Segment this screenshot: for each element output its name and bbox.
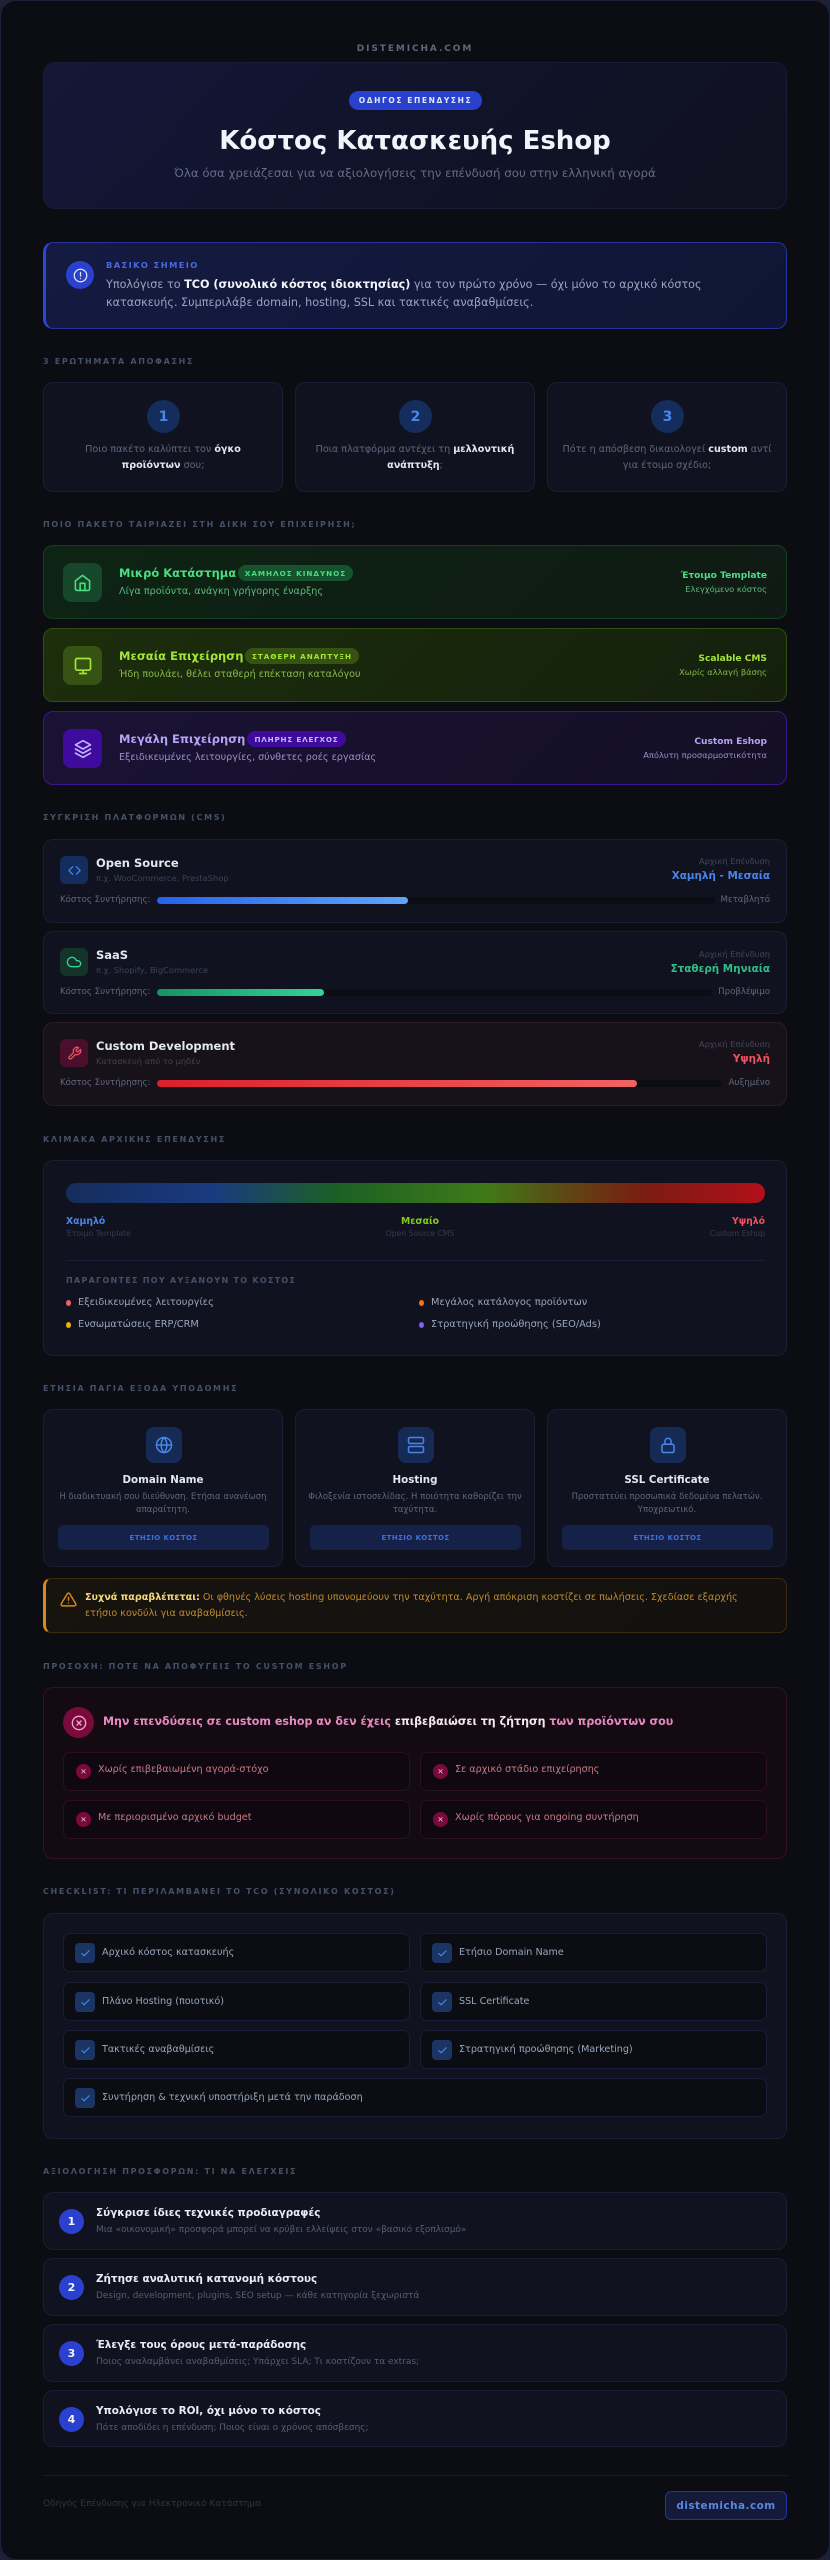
number 1 [147, 400, 180, 433]
investment label: Αρχική Επένδυση [699, 1039, 770, 1049]
question text: για έτοιμο σχέδιο; [623, 460, 711, 471]
icon: x circle [63, 1707, 94, 1738]
heading: tco checklist: CHECKLIST: ΤΙ ΠΕΡΙΛΑΜΒΑΝΕΙ ΤΟ TCO (ΣΥΝΟΛΙΚΟ ΚΟΣΤΟΣ) [43, 1887, 396, 1896]
item 3 [63, 1800, 410, 1839]
maintenance bar [157, 1080, 722, 1087]
factor 2: Μεγάλος κατάλογος προϊόντων [431, 1297, 587, 1308]
step number [59, 2275, 84, 2300]
panel: small store [43, 545, 787, 619]
maintenance label: Κόστος Συντήρησης: [60, 1078, 150, 1088]
item 2 [420, 1752, 767, 1791]
heading: decision questions: 3 ΕΡΩΤΗΜΑΤΑ ΑΠΟΦΑΣΗΣ [43, 357, 194, 366]
card text: Προστατεύει προσωπικά δεδομένα πελατών. [572, 1492, 762, 1502]
maintenance note: Μεταβλητό [720, 895, 770, 905]
icon: home [63, 563, 102, 602]
package title: Μικρό Κατάστημα [119, 566, 236, 580]
platform name: Custom Development [96, 1039, 235, 1053]
item text: Με περιορισμένο αρχικό budget [98, 1812, 251, 1823]
callout text [106, 278, 702, 309]
check icon [432, 1943, 452, 1963]
heading: when to avoid custom: ΠΡΟΣΟΧΗ: ΠΟΤΕ ΝΑ ΑΠΟΦΥΓΕΙΣ ΤΟ CUSTOM ESHOP [43, 1662, 348, 1671]
maintenance label: Κόστος Συντήρησης: [60, 895, 150, 905]
panel: question 2 [295, 382, 535, 492]
number 2: 2 [411, 408, 420, 424]
high note: Custom Eshop [710, 1229, 765, 1238]
question text: Πότε η απόσβεση δικαιολογεί custom αντί [563, 444, 771, 455]
card title: Hosting [393, 1474, 437, 1486]
platform examples: Κατασκευή από το μηδέν [96, 1056, 200, 1066]
annual cost button [58, 1525, 269, 1550]
recommendation note: Ελεγχόμενο κόστος [685, 584, 767, 594]
platform examples: π.χ. Shopify, BigCommerce [96, 965, 208, 975]
x icon: ✕ [437, 1815, 444, 1824]
low note: Έτοιμο Template [66, 1229, 131, 1238]
item text: Σε αρχικό στάδιο επιχείρησης [455, 1764, 599, 1775]
question text: Ποιο πακέτο καλύπτει τον όγκο [85, 444, 241, 455]
check icon [75, 2088, 95, 2108]
panel: step 1 [43, 2192, 787, 2250]
header brand label: DISTEMICHA.COM [357, 44, 473, 54]
x icon: ✕ [80, 1767, 87, 1776]
panel: step 4 [43, 2390, 787, 2447]
heading: which package: ΠΟΙΟ ΠΑΚΕΤΟ ΤΑΙΡΙΑΖΕΙ ΣΤΗ ΔΙΚΗ ΣΟΥ ΕΠΙΧΕΙΡΗΣΗ; [43, 520, 356, 529]
x icon [433, 1764, 448, 1779]
check item 2 [420, 1933, 767, 1972]
question text [316, 444, 514, 471]
check item 5 [63, 2030, 410, 2069]
card title: SSL Certificate [624, 1474, 710, 1486]
panel: medium business [43, 628, 787, 702]
icon: lock [650, 1427, 686, 1463]
investment label: Αρχική Επένδυση [699, 949, 770, 959]
footer note: Οδηγός Επένδυσης για Ηλεκτρονικό Κατάστημα [43, 2499, 261, 2509]
factor 4: Στρατηγική προώθησης (SEO/Ads) [431, 1319, 601, 1330]
item text: Χωρίς πόρους για ongoing συντήρηση [455, 1812, 639, 1823]
number 2 [399, 400, 432, 433]
maintenance label: Κόστος Συντήρησης: [60, 987, 150, 997]
annual cost button [562, 1525, 773, 1550]
step text: Μια «οικονομική» προσφορά μπορεί να κρύβει ελλείψεις στον «βασικό εξοπλισμό» [96, 2225, 466, 2235]
step title: Ζήτησε αναλυτική κατανομή κόστους [96, 2273, 317, 2285]
item text: SSL Certificate [459, 1996, 529, 2007]
item 4 [420, 1800, 767, 1839]
x icon [76, 1812, 91, 1827]
platform examples: π.χ. WooCommerce, PrestaShop [96, 873, 229, 883]
x icon [76, 1764, 91, 1779]
step number: 1 [68, 2215, 75, 2228]
growth tag [245, 648, 359, 664]
callout: warning [43, 1578, 787, 1633]
question text: Ποια πλατφόρμα αντέχει τη μελλοντική [316, 444, 514, 455]
step number: 2 [68, 2281, 75, 2294]
panel: large business [43, 711, 787, 785]
low label: Χαμηλό [66, 1216, 105, 1227]
annual cost button: ΕΤΗΣΙΟ ΚΟΣΤΟΣ [381, 1534, 450, 1542]
icon: globe [146, 1427, 182, 1463]
step title: Έλεγξε τους όρους μετά-παράδοσης [96, 2339, 306, 2351]
icon: cloud [60, 948, 88, 976]
risk tag [238, 565, 353, 581]
callout: key point [43, 242, 787, 329]
annual cost button: ΕΤΗΣΙΟ ΚΟΣΤΟΣ [633, 1534, 702, 1542]
factor 3: Ενσωματώσεις ERP/CRM [78, 1319, 199, 1330]
investment value: Χαμηλή - Μεσαία [672, 870, 770, 882]
step title: Σύγκρισε ίδιες τεχνικές προδιαγραφές [96, 2207, 320, 2219]
package description: Εξειδικευμένες λειτουργίες, σύνθετες ροές εργασίας [119, 752, 376, 763]
investment value: Υψηλή [733, 1053, 770, 1065]
warning text: ετήσιο κονδύλι για αναβαθμίσεις. [85, 1608, 248, 1619]
panel: hosting [295, 1409, 535, 1567]
package recommendation: Scalable CMS [698, 654, 767, 664]
panel: step 3 [43, 2324, 787, 2382]
callout text: Υπολόγισε το TCO (συνολικό κόστος ιδιοκτησίας) για τον πρώτο χρόνο — όχι μόνο το αρχικό κόστος [106, 278, 702, 291]
factors heading: ΠΑΡΑΓΟΝΤΕΣ ΠΟΥ ΑΥΞΑΝΟΥΝ ΤΟ ΚΟΣΤΟΣ [66, 1276, 296, 1285]
panel: question 3 [547, 382, 787, 492]
item text: Συντήρηση & τεχνική υποστήριξη μετά την παράδοση [102, 2092, 363, 2103]
number 3: 3 [663, 408, 672, 424]
factor 1: Εξειδικευμένες λειτουργίες [78, 1297, 214, 1308]
control tag [247, 731, 346, 747]
high label: Υψηλό [732, 1216, 765, 1227]
step title: Υπολόγισε το ROI, όχι μόνο το κόστος [96, 2405, 321, 2417]
risk tag: ΧΑΜΗΛΟΣ ΚΙΝΔΥΝΟΣ [245, 568, 346, 578]
recommendation note: Απόλυτη προσαρμοστικότητα [643, 750, 767, 760]
step number [59, 2407, 84, 2432]
footer badge [665, 2491, 787, 2520]
panel: hero [43, 62, 787, 209]
x icon: ✕ [80, 1815, 87, 1824]
step text: Ποιος αναλαμβάνει αναβαθμίσεις; Υπάρχει SLA; Τι κοστίζουν τα extras; [96, 2357, 419, 2367]
control tag: ΠΛΗΡΗΣ ΕΛΕΓΧΟΣ [254, 734, 338, 744]
item text: Χωρίς επιβεβαιωμένη αγορά-στόχο [98, 1764, 269, 1775]
check icon [75, 1992, 95, 2012]
item text: Αρχικό κόστος κατασκευής [102, 1947, 234, 1958]
icon: warning triangle [60, 1592, 77, 1607]
check item 7 [63, 2078, 767, 2117]
warning text [85, 1592, 738, 1619]
package recommendation: Έτοιμο Template [681, 571, 767, 581]
step text: Πότε αποδίδει η επένδυση; Ποιος είναι ο χρόνος απόσβεσης; [96, 2423, 369, 2433]
step number: 3 [68, 2347, 75, 2360]
x icon [433, 1812, 448, 1827]
mid label: Μεσαίο [401, 1216, 439, 1227]
panel: avoid custom [43, 1687, 787, 1859]
panel: step 2 [43, 2258, 787, 2316]
step text: Design, development, plugins, SEO setup — κάθε κατηγορία ξεχωριστά [96, 2291, 419, 2301]
x icon: ✕ [437, 1767, 444, 1776]
package description: Ήδη πουλάει, θέλει σταθερή επέκταση καταλόγου [119, 669, 361, 680]
recommendation note: Χωρίς αλλαγή βάσης [679, 667, 767, 677]
growth tag: ΣΤΑΘΕΡΗ ΑΝΑΠΤΥΞΗ [252, 652, 352, 660]
maintenance bar [157, 897, 715, 904]
question text [563, 444, 772, 471]
panel: investment scale [43, 1160, 787, 1356]
card text: Υποχρεωτικό. [638, 1505, 696, 1515]
item 1 [63, 1752, 410, 1791]
number 3 [651, 400, 684, 433]
annual cost button [310, 1525, 521, 1550]
icon: wrench [60, 1039, 88, 1067]
card text: Φιλοξενία ιστοσελίδας. Η ποιότητα καθορίζει την [308, 1492, 522, 1502]
callout text: κατασκευής. Συμπεριλάβε domain, hosting, SSL και τακτικές αναβαθμίσεις. [106, 296, 533, 309]
package description: Λίγα προϊόντα, ανάγκη γρήγορης έναρξης [119, 586, 323, 597]
number 1: 1 [159, 408, 168, 424]
step number [59, 2209, 84, 2234]
heading: evaluating offers: ΑΞΙΟΛΟΓΗΣΗ ΠΡΟΣΦΟΡΩΝ: ΤΙ ΝΑ ΕΛΕΓΧΕΙΣ [43, 2167, 297, 2176]
heading: investment scale: ΚΛΙΜΑΚΑ ΑΡΧΙΚΗΣ ΕΠΕΝΔΥΣΗΣ [43, 1135, 226, 1144]
gradient scale bar [66, 1183, 765, 1203]
panel: domain name [43, 1409, 283, 1567]
question text: προϊόντων σου; [122, 460, 204, 471]
icon: layers [63, 729, 102, 768]
card text [308, 1492, 522, 1515]
question text: ανάπτυξη; [387, 460, 443, 471]
check item 3 [63, 1982, 410, 2021]
step number: 4 [68, 2413, 75, 2426]
card text [572, 1492, 762, 1515]
card text [59, 1492, 267, 1515]
platform name: SaaS [96, 948, 128, 962]
platform name: Open Source [96, 856, 179, 870]
hero badge: ΟΔΗΓΟΣ ΕΠΕΝΔΥΣΗΣ [359, 96, 472, 105]
check icon [432, 1992, 452, 2012]
check icon [75, 1943, 95, 1963]
panel title: Μην επενδύσεις σε custom eshop αν δεν έχεις επιβεβαιώσει τη ζήτηση των προϊόντων σου [103, 1715, 673, 1728]
card title: Domain Name [122, 1474, 204, 1486]
callout label: ΒΑΣΙΚΟ ΣΗΜΕΙΟ [106, 260, 199, 270]
check icon [432, 2040, 452, 2060]
heading: annual costs: ΕΤΗΣΙΑ ΠΑΓΙΑ ΕΞΟΔΑ ΥΠΟΔΟΜΗΣ [43, 1384, 238, 1393]
item text: Ετήσιο Domain Name [459, 1947, 564, 1958]
annual cost button: ΕΤΗΣΙΟ ΚΟΣΤΟΣ [129, 1534, 198, 1542]
panel: custom development [43, 1022, 787, 1106]
icon: code [60, 856, 88, 884]
mid note: Open Source CMS [386, 1229, 454, 1238]
panel: checklist [43, 1913, 787, 2139]
maintenance note: Αυξημένο [729, 1078, 770, 1088]
package title: Μεσαία Επιχείρηση [119, 649, 243, 663]
icon: server [398, 1427, 434, 1463]
heading: platform comparison: ΣΥΓΚΡΙΣΗ ΠΛΑΤΦΟΡΜΩΝ (CMS) [43, 813, 226, 822]
item text: Στρατηγική προώθησης (Marketing) [459, 2044, 633, 2055]
panel: open source [43, 839, 787, 923]
item text: Πλάνο Hosting (ποιοτικό) [102, 1996, 224, 2007]
subtitle: Όλα όσα χρειάζεσαι για να αξιολογήσεις την επένδυσή σου στην ελληνική αγορά [174, 166, 656, 180]
check item 1 [63, 1933, 410, 1972]
icon: monitor [63, 646, 102, 685]
step number [59, 2341, 84, 2366]
panel: question 1 [43, 382, 283, 492]
card text: απαραίτητη. [136, 1505, 190, 1515]
icon: alert circle [66, 261, 94, 289]
panel: saas [43, 931, 787, 1014]
check item 4 [420, 1982, 767, 2021]
panel: ssl [547, 1409, 787, 1567]
title: Κόστος Κατασκευής Eshop [219, 126, 611, 156]
package title: Μεγάλη Επιχείρηση [119, 732, 245, 746]
hero badge [349, 91, 482, 110]
package recommendation: Custom Eshop [694, 737, 767, 747]
footer badge: distemicha.com [676, 2500, 776, 2512]
warning text: Συχνά παραβλέπεται: Οι φθηνές λύσεις hosting υπονομεύουν την ταχύτητα. Αργή απόκριση κοστίζει σε πωλήσεις. Σχεδίασε εξαρχής [85, 1592, 738, 1603]
check item 6 [420, 2030, 767, 2069]
maintenance note: Προβλέψιμο [718, 987, 770, 997]
investment value: Σταθερή Μηνιαία [671, 963, 770, 975]
maintenance bar [157, 989, 712, 996]
check icon [75, 2040, 95, 2060]
question text [85, 444, 241, 471]
item text: Τακτικές αναβαθμίσεις [102, 2044, 214, 2055]
card text: ταχύτητα. [393, 1505, 437, 1515]
card text: Η διαδικτυακή σου διεύθυνση. Ετήσια ανανέωση [59, 1492, 267, 1502]
investment label: Αρχική Επένδυση [699, 856, 770, 866]
